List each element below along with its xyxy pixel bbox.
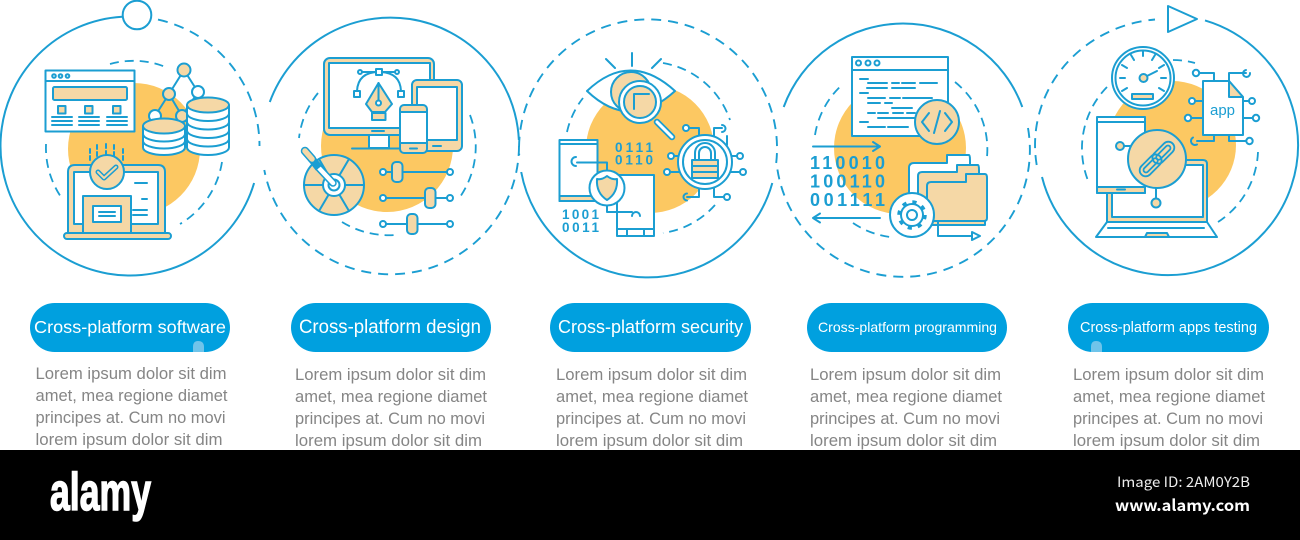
image id: Image ID: 2AM0Y2B [1117, 472, 1250, 492]
circle frame 4 [777, 24, 1030, 277]
panel: cross-platform apps testing [1035, 6, 1298, 275]
text block: programming: principes at. Cum no movi [810, 410, 1000, 428]
footer bar [0, 450, 1300, 540]
icon: circuit lock [664, 125, 746, 200]
icon: speedometer [1112, 47, 1174, 109]
icon: tablet [1097, 117, 1145, 193]
text block: software: lorem ipsum dolor sit dim [36, 431, 222, 449]
arrows: data flow [813, 142, 880, 222]
binary text large: 110010 [810, 153, 885, 173]
icon: color wheel and eyedropper [304, 151, 364, 215]
text block: apps testing: principes at. Cum no movi [1073, 410, 1263, 428]
icon: app file circuit: app [1210, 102, 1235, 119]
heading pill: programming: Cross-platform programming [818, 319, 997, 335]
icon: laptop [1096, 160, 1217, 237]
text block: design: Lorem ipsum dolor sit dim [295, 366, 486, 384]
text block: design: amet, mea regione diamet [295, 388, 487, 406]
text block: design: principes at. Cum no movi [295, 410, 485, 428]
text block: security: principes at. Cum no movi [556, 410, 746, 428]
icon: sliders [380, 162, 453, 234]
binary text large: 100110 [810, 172, 885, 192]
icon: gear badge [890, 193, 934, 237]
icon: folders [909, 155, 987, 240]
text block: software: Lorem ipsum dolor sit dim [36, 365, 226, 383]
heading pill: software: Cross-platform software [34, 317, 226, 337]
binary text bottom: 1001 [562, 207, 599, 222]
icon: browser window [46, 70, 134, 132]
logo: alamy: alamy [50, 463, 151, 522]
icon: monitor with pen tool [324, 58, 434, 148]
heading pill: software [30, 303, 230, 352]
panel: cross-platform design [264, 18, 519, 274]
text block: programming: Lorem ipsum dolor sit dim [810, 366, 1001, 384]
panel: cross-platform software [0, 1, 259, 276]
icon: database stacks [143, 98, 229, 155]
panel: cross-platform security [519, 19, 777, 277]
heading pill: design [291, 303, 491, 352]
binary text bottom: 0011 [562, 220, 599, 235]
heading pill: apps testing [1068, 303, 1269, 352]
icon: tablets with shield [560, 140, 654, 236]
binary text top: 0111 [615, 140, 653, 155]
circle frame 2 [264, 18, 519, 274]
text block: software: principes at. Cum no movi [36, 409, 226, 427]
binary text top: 0110 [615, 152, 653, 168]
website: www.alamy.com [1115, 494, 1250, 516]
text block: software: amet, mea regione diamet [36, 387, 228, 405]
icon: data nodes [149, 64, 204, 122]
text block: security: amet, mea regione diamet [556, 388, 748, 406]
heading pill: design: Cross-platform design [299, 317, 481, 338]
icon: code window [852, 57, 959, 144]
heading pill: security: Cross-platform security [558, 317, 743, 337]
circle frame 3 [519, 19, 777, 277]
icon: app file circuit [1185, 70, 1259, 145]
binary text large: 001111 [810, 190, 885, 210]
icon: laptop with check badge [64, 144, 171, 239]
circle frame 1 [0, 1, 259, 276]
icon: eye with magnifier [587, 53, 675, 137]
text block: apps testing: amet, mea regione diamet [1073, 388, 1265, 406]
text block: programming: lorem ipsum dolor sit dim [810, 432, 997, 450]
text block: apps testing: Lorem ipsum dolor sit dim [1073, 366, 1264, 384]
text block: security: lorem ipsum dolor sit dim [556, 432, 743, 450]
icon: tablet and phone [400, 80, 462, 153]
heading pill: apps testing: Cross-platform apps testing [1080, 320, 1257, 336]
text block: design: lorem ipsum dolor sit dim [295, 432, 482, 450]
heading pill: programming [807, 303, 1007, 352]
heading pill: security [550, 303, 751, 352]
icon: chain link badge [1128, 130, 1186, 208]
text block: programming: amet, mea regione diamet [810, 388, 1002, 406]
circle frame 5 [1035, 6, 1298, 275]
panel: cross-platform programming [777, 24, 1030, 277]
text block: security: Lorem ipsum dolor sit dim [556, 366, 747, 384]
text block: apps testing: lorem ipsum dolor sit dim [1073, 432, 1260, 450]
